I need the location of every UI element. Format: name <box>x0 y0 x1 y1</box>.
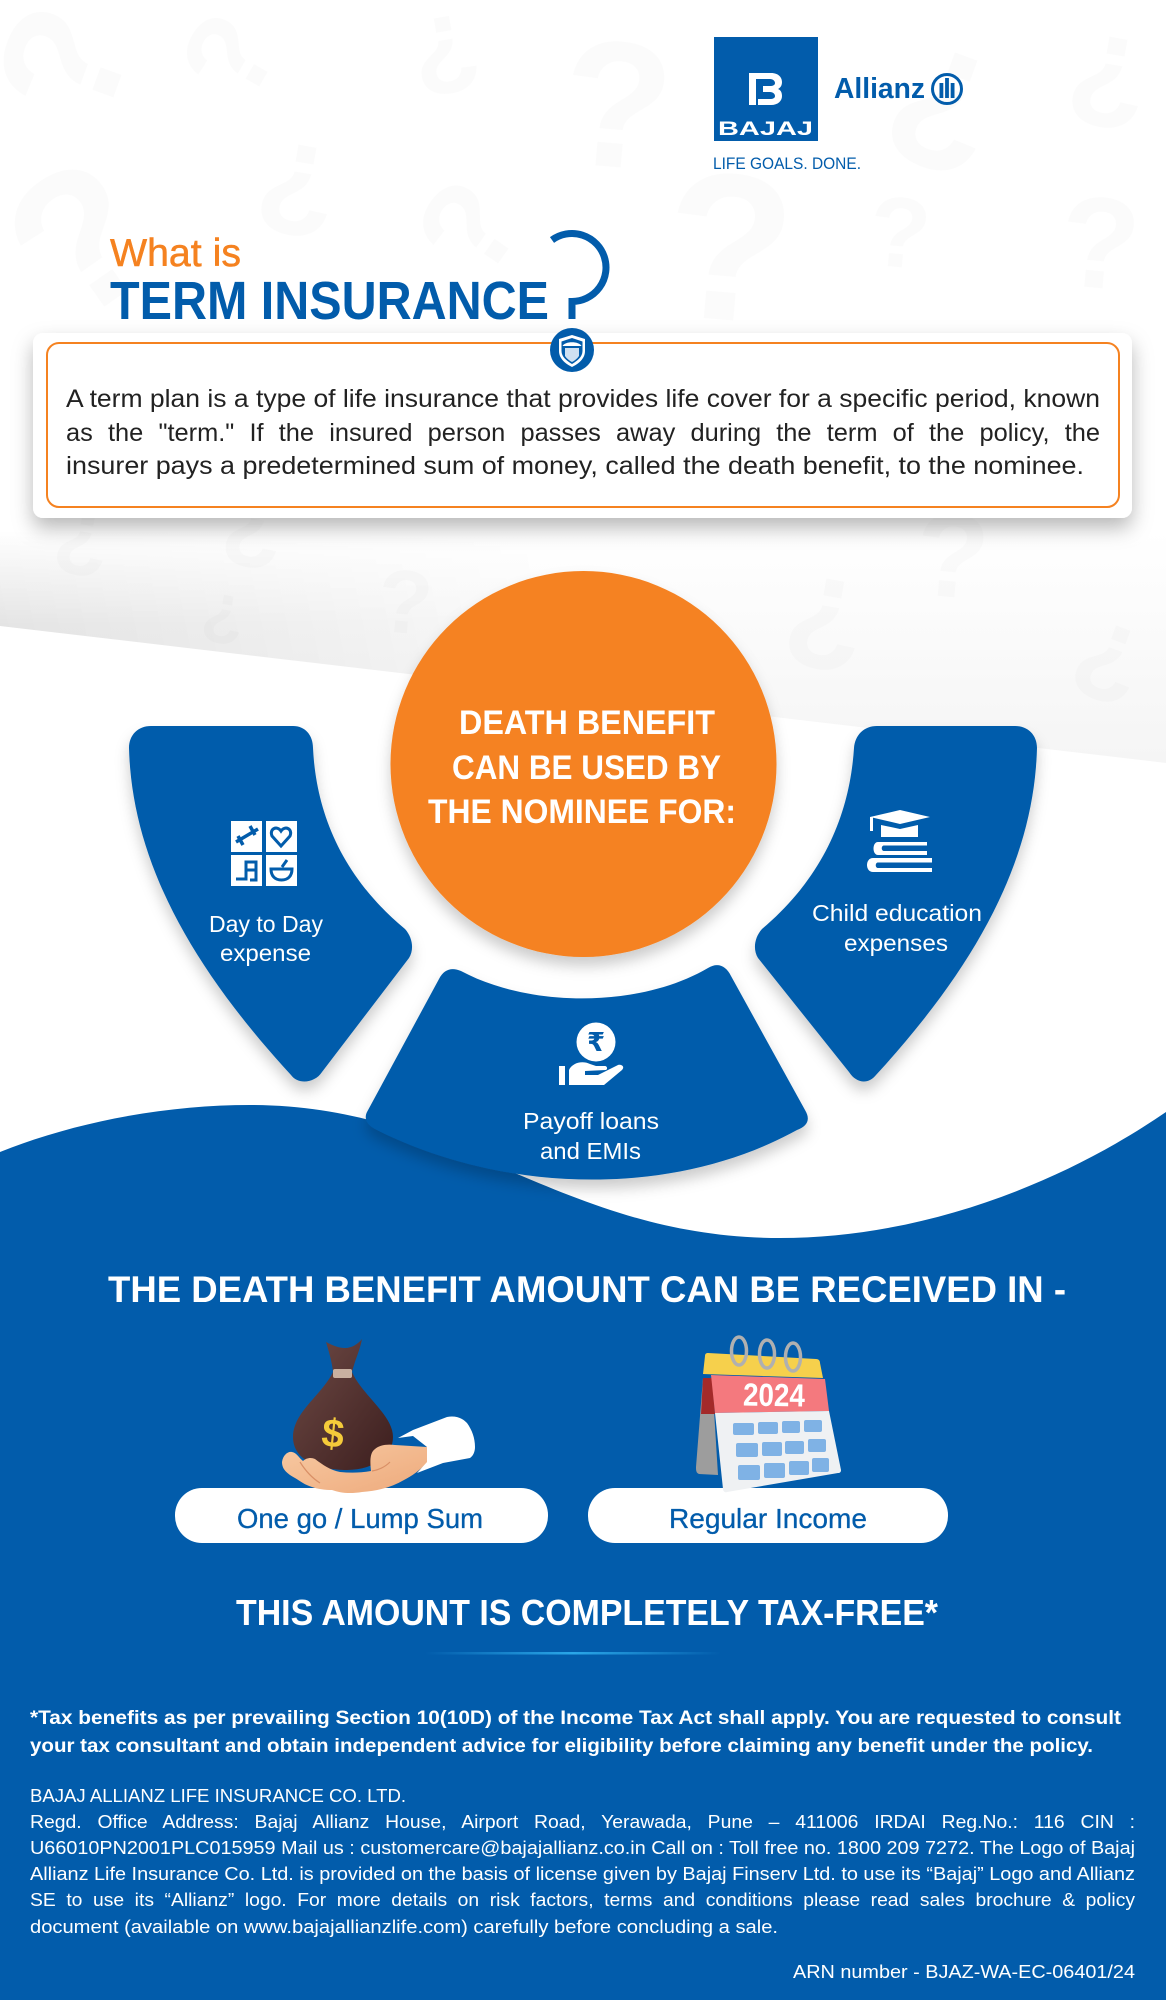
company legal text <box>30 1785 1136 1937</box>
white page <box>715 1411 841 1492</box>
title line: Term Insurance: TERM INSURANCE <box>110 271 549 331</box>
label: expense <box>220 940 311 966</box>
background question marks: ? <box>385 154 551 302</box>
icon: hand holding money bag <box>282 1339 475 1493</box>
panel: Payoff loans and EMIs <box>366 965 808 1180</box>
label: Child education <box>812 900 982 926</box>
shirt cuff <box>398 1417 475 1473</box>
yellow header <box>703 1353 823 1378</box>
background question marks: ? <box>910 486 994 626</box>
definition text: as the "term." If the insured person passes away during the term of the policy, the <box>66 419 1100 447</box>
definition text <box>66 385 1100 480</box>
label: Day to Day <box>209 911 324 937</box>
background question marks: ? <box>373 551 437 655</box>
definition text: A term plan is a type of life insurance that provides life cover for a specific period, known <box>66 385 1100 413</box>
background question marks: ? <box>1056 3 1160 161</box>
title <box>110 232 606 331</box>
definition text: insurer pays a predetermined sum of money, called the death benefit, to the nominee. <box>66 452 1084 480</box>
hand <box>282 1445 427 1493</box>
heading: tax free: THIS AMOUNT IS COMPLETELY TAX-FREE* <box>236 1592 938 1633</box>
background question marks: ? <box>213 472 293 592</box>
company legal text: Regd. Office Address: Bajaj Allianz House, Airport Road, Yerawada, Pune – 411006 IRDAI Reg.No.: 116 CIN : <box>30 1811 1135 1832</box>
tax disclaimer text: your tax consultant and obtain independent advice for eligibility before claiming any benefit under the policy. <box>30 1735 1093 1757</box>
Allianz wordmark: Allianz <box>834 73 925 105</box>
company legal text: Allianz Life Insurance Co. Ltd. is provided on the basis of license given by Bajaj Finserv Ltd. to use its “Bajaj” Logo and Allianz <box>30 1863 1135 1884</box>
panel: definition card <box>33 328 1132 518</box>
icon: hand holding rupee coin <box>559 1022 623 1085</box>
icon: four expense squares <box>231 821 297 886</box>
label <box>209 911 324 966</box>
circle heading: THE NOMINEE FOR: <box>428 793 736 831</box>
icon: 2024 calendar <box>696 1337 841 1492</box>
panel: Day to Day expense <box>129 726 412 1081</box>
back page <box>696 1378 718 1475</box>
background question marks: ? <box>773 545 877 703</box>
company legal text: SE to use its “Allianz” logo. For more details on risk factors, terms and conditions please read sales brochure & policy <box>30 1889 1136 1910</box>
icon: graduation cap on books <box>867 810 932 872</box>
label: expenses <box>844 930 948 956</box>
background question marks: ? <box>1054 167 1146 319</box>
decorative glow line <box>425 1652 721 1654</box>
label: and EMIs <box>540 1138 641 1164</box>
date cells <box>733 1420 829 1480</box>
icon: 2024 calendar: 2024 <box>743 1376 805 1414</box>
label <box>812 900 982 956</box>
logo: Bajaj Allianz <box>713 37 962 173</box>
central orange circle <box>390 571 776 957</box>
icon: hand holding money bag: $ <box>320 1411 346 1457</box>
background question marks: ? <box>554 1 681 210</box>
tagline: LIFE GOALS. DONE. <box>713 155 861 173</box>
pill: Regular Income <box>588 1488 948 1543</box>
label: Payoff loans <box>523 1108 659 1134</box>
pill: Regular Income: Regular Income <box>669 1503 867 1534</box>
company legal text: BAJAJ ALLIANZ LIFE INSURANCE CO. LTD. <box>30 1785 406 1806</box>
tax disclaimer text: *Tax benefits as per prevailing Section 10(10D) of the Income Tax Act shall apply. You are requested to consult <box>30 1707 1122 1729</box>
company legal text: U66010PN2001PLC015959 Mail us : customercare@bajajallianz.co.in Call on : Toll free no. 1800 209 7272. The Logo of Bajaj <box>30 1837 1135 1858</box>
money bag <box>293 1339 393 1470</box>
panel: Child education expenses <box>755 726 1037 1081</box>
circle heading <box>428 704 736 831</box>
circle heading: CAN BE USED BY <box>452 749 721 787</box>
background question marks: ? <box>865 175 935 291</box>
tax disclaimer text <box>30 1707 1122 1757</box>
heading: death benefit received: THE DEATH BENEFIT AMOUNT CAN BE RECEIVED IN - <box>108 1268 1066 1310</box>
pill: One go / Lump Sum: One go / Lump Sum <box>237 1503 483 1534</box>
grey band left shading <box>0 566 372 670</box>
blue wave background <box>0 1105 1166 2000</box>
pill: One go / Lump Sum <box>175 1488 548 1543</box>
background question marks: ? <box>655 125 803 370</box>
background question marks: ? <box>1056 593 1161 732</box>
icon: question mark <box>552 234 606 319</box>
icon: shield badge <box>550 328 594 372</box>
background question marks: ? <box>195 577 251 661</box>
Allianz emblem <box>932 74 962 104</box>
circle heading: DEATH BENEFIT <box>459 704 715 742</box>
company legal text: document (available on www.bajajallianzlife.com) carefully before concluding a sale. <box>30 1916 778 1937</box>
icon: hand holding rupee coin: ₹ <box>587 1028 605 1058</box>
binding rings <box>732 1337 800 1371</box>
ARN number: ARN number - BJAZ-WA-EC-06401/24 <box>793 1961 1135 1982</box>
background question marks: ? <box>245 111 349 269</box>
label <box>523 1108 659 1164</box>
grey diagonal background band <box>0 500 1166 763</box>
Bajaj square <box>714 37 818 141</box>
background question marks: ? <box>46 489 118 597</box>
background question marks <box>0 0 1161 732</box>
Bajaj square: BAJAJ <box>718 119 813 140</box>
background question marks: ? <box>862 3 1024 217</box>
red band <box>711 1375 829 1413</box>
title line: What is: What is <box>110 232 241 275</box>
